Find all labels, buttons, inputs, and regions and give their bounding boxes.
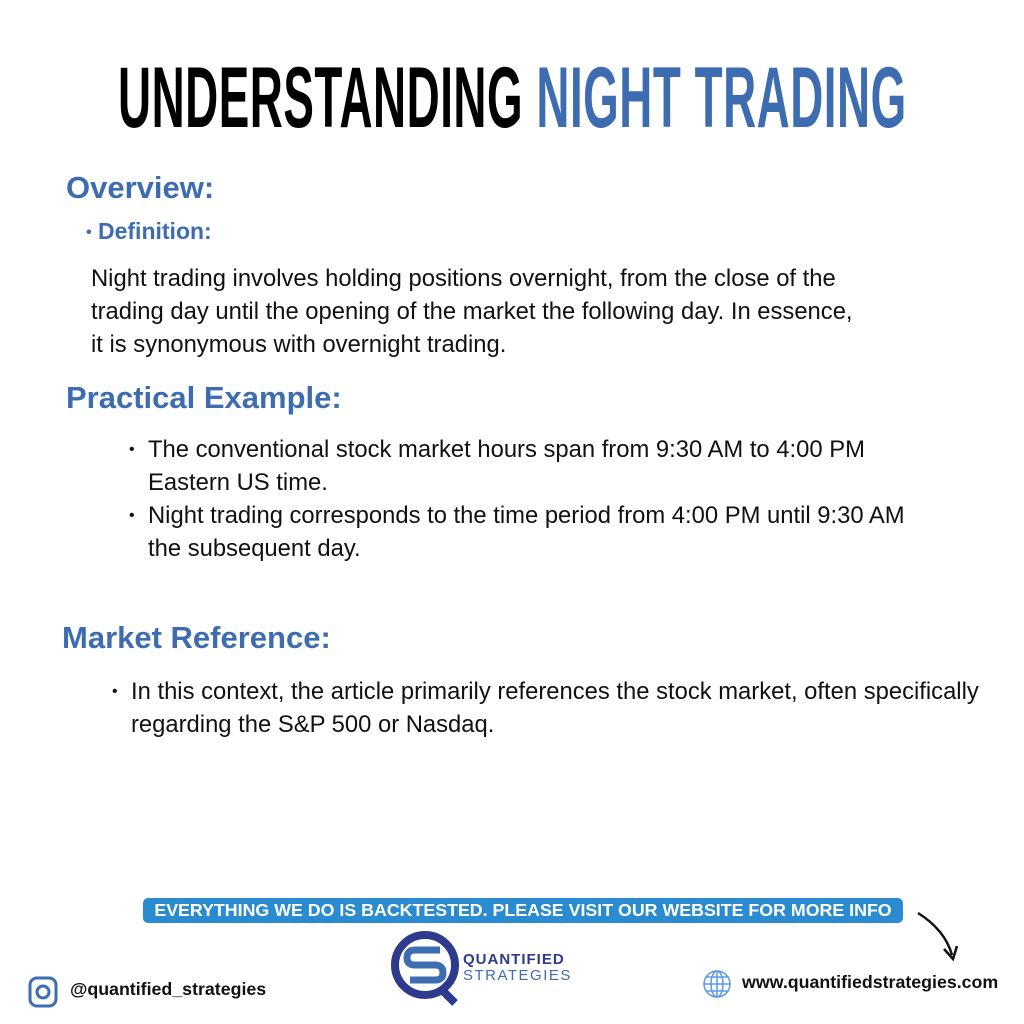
practical example bullets: the subsequent day. (148, 535, 361, 562)
market reference bullet: regarding the S&P 500 or Nasdaq. (131, 711, 494, 738)
heading: market reference: Market Reference: (62, 620, 331, 655)
practical example bullets: Night trading corresponds to the time period from 4:00 PM until 9:30 AM (148, 502, 905, 529)
definition label: • Definition: (86, 218, 212, 244)
logo (391, 931, 572, 1006)
practical example bullets (129, 436, 905, 562)
market reference bullet (112, 678, 979, 738)
definition text (91, 265, 853, 358)
website (703, 970, 998, 998)
market reference bullet: In this context, the article primarily references the stock market, often specifically (131, 678, 979, 705)
heading: practical example: Practical Example: (66, 380, 342, 415)
logo: STRATEGIES (463, 967, 572, 984)
arrow (917, 912, 958, 962)
logo: QUANTIFIED (463, 951, 565, 968)
definition text: Night trading involves holding positions overnight, from the close of the (91, 265, 836, 292)
text: • (112, 683, 118, 700)
banner: EVERYTHING WE DO IS BACKTESTED. PLEASE VISIT OUR WEBSITE FOR MORE INFO (154, 900, 892, 920)
website: www.quantifiedstrategies.com (742, 972, 998, 992)
practical example bullets: The conventional stock market hours span from 9:30 AM to 4:00 PM (148, 436, 865, 463)
heading: overview: Overview: (66, 170, 214, 205)
text: • (129, 507, 135, 524)
definition text: it is synonymous with overnight trading. (91, 331, 506, 358)
practical example bullets: Eastern US time. (148, 469, 328, 496)
definition text: trading day until the opening of the market the following day. In essence, (91, 298, 853, 325)
title: UNDERSTANDING NIGHT TRADING (118, 50, 907, 146)
instagram handle: @quantified_strategies (70, 979, 266, 999)
instagram handle (28, 976, 266, 1008)
text: • (129, 441, 135, 458)
